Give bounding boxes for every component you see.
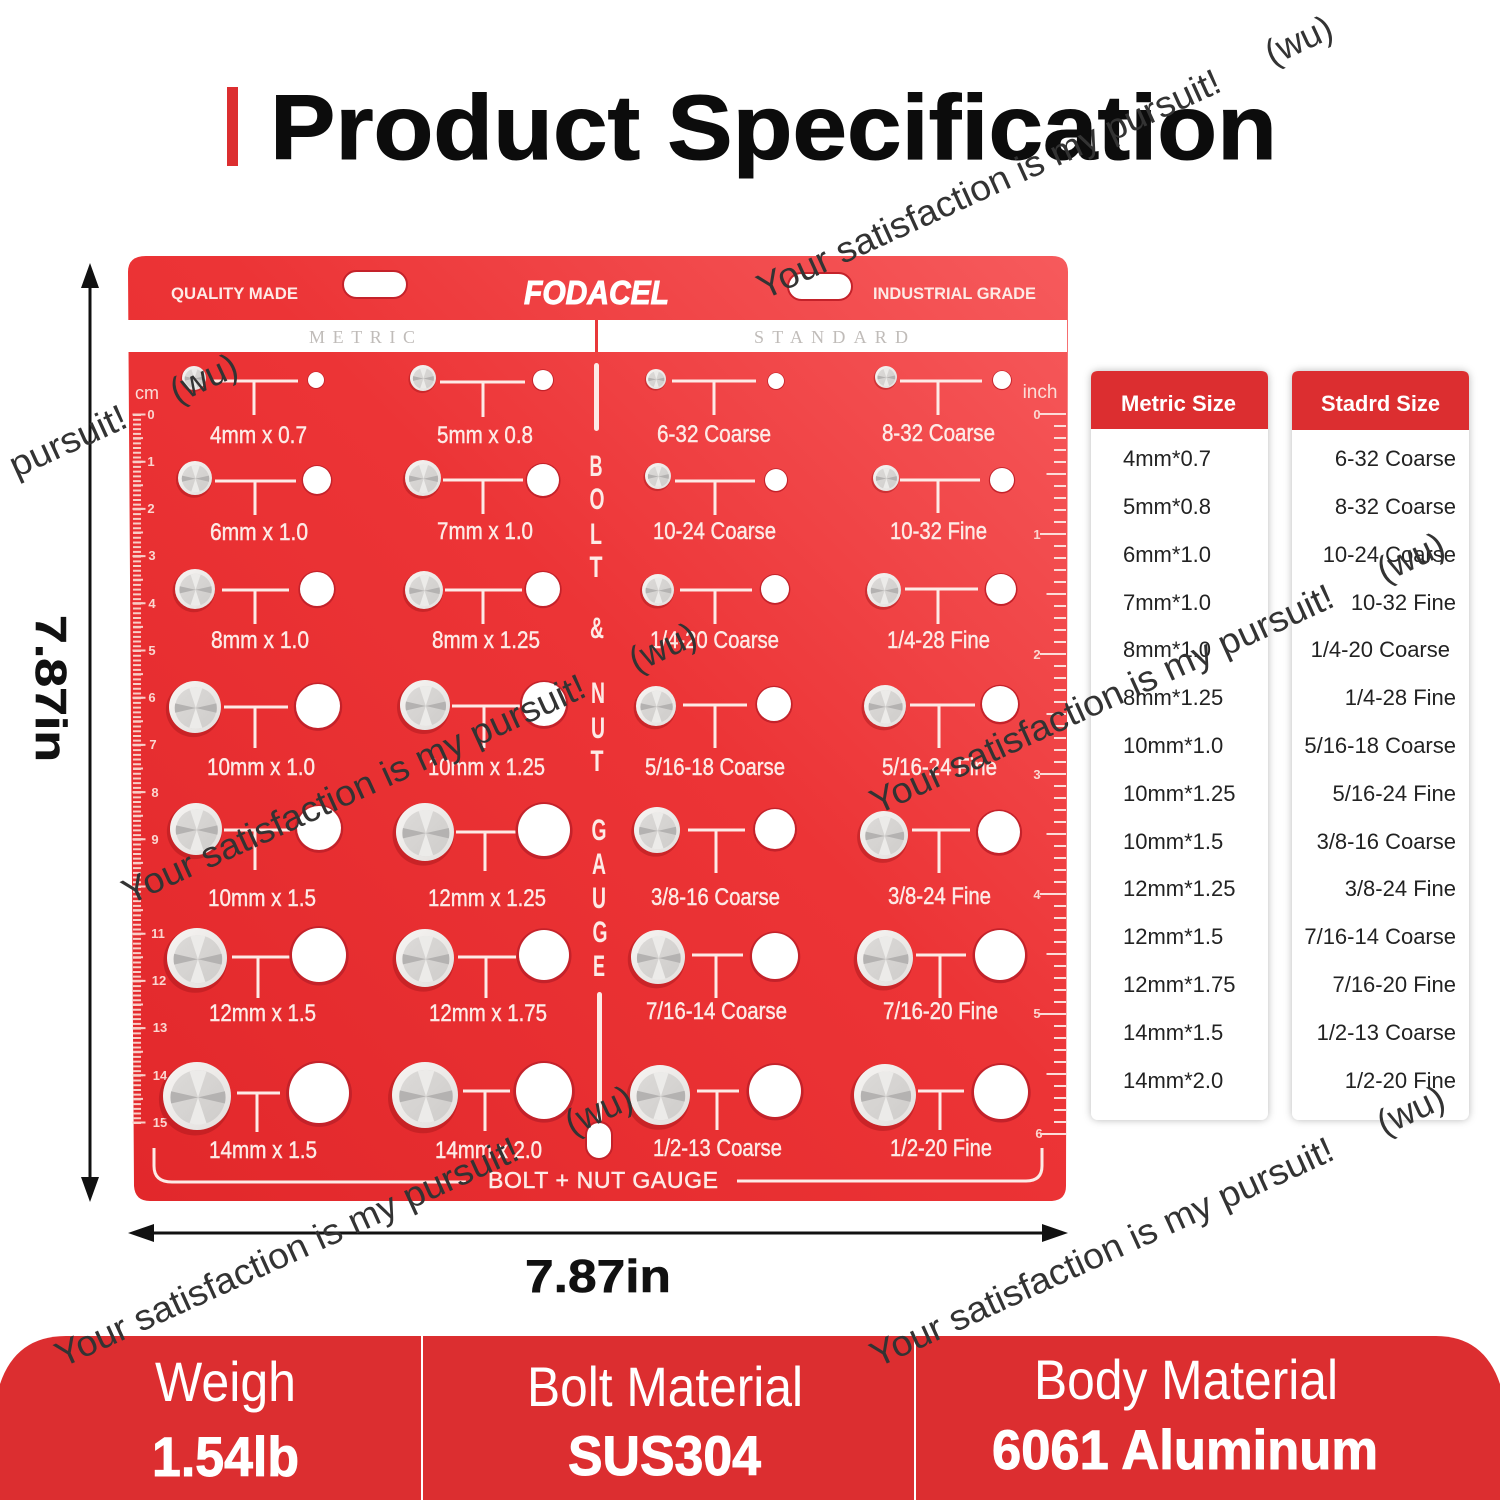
watermark text: (wu): [622, 614, 703, 680]
item: 5mm x 0.8: [408, 365, 554, 449]
item: 12mm x 1.75: 12mm x 1.75: [429, 1000, 547, 1027]
metric sizes list: 14mm*2.0: [1123, 1068, 1223, 1093]
centimetre ruler: 0: [147, 407, 155, 422]
item: 8mm x 1.0: [173, 569, 336, 654]
metric sizes list: 12mm*1.5: [1123, 924, 1223, 949]
standard sizes list: 5/16-24 Fine: [1332, 781, 1456, 806]
inch ruler: [1023, 382, 1060, 1141]
center vertical title: T: [590, 551, 602, 584]
gauge footer bracket: BOLT + NUT GAUGE: [488, 1167, 718, 1193]
item: 7/16-14 Coarse: [628, 930, 800, 1025]
item: 1/2-20 Fine: 1/2-20 Fine: [890, 1135, 992, 1162]
center vertical title: E: [593, 950, 605, 983]
metric table header: Metric Size: [1121, 391, 1236, 416]
item: 10mm x 1.25: 10mm x 1.25: [428, 754, 545, 781]
standard table header: Stadrd Size: [1321, 391, 1440, 416]
height dimension arrow: 7.87in: [26, 615, 75, 762]
body material block: [992, 1348, 1378, 1481]
center vertical title: G: [592, 916, 608, 949]
weigh block: 1.54lb: [152, 1425, 299, 1488]
centimetre ruler: [135, 383, 168, 1130]
standard sizes list: 1/2-20 Fine: [1345, 1068, 1456, 1093]
panel: standard size table: [1292, 371, 1469, 1120]
centimetre ruler: 14: [153, 1068, 168, 1083]
item: 8-32 Coarse: 8-32 Coarse: [882, 420, 995, 447]
title: Product Specification: [270, 77, 1277, 179]
item: 7/16-20 Fine: [854, 928, 1028, 1025]
inch ruler: 6: [1035, 1126, 1043, 1141]
plate header text: FODACEL: [524, 274, 669, 311]
item: 6mm x 1.0: 6mm x 1.0: [210, 519, 308, 546]
standard sizes list: 1/4-28 Fine: [1345, 685, 1456, 710]
watermark text: (wu): [1370, 1077, 1451, 1143]
item: 3/8-16 Coarse: [631, 807, 797, 911]
inch ruler: inch: [1023, 382, 1057, 403]
center vertical title: [586, 363, 612, 1159]
watermark text: (wu): [163, 345, 244, 411]
item: 4mm x 0.7: 4mm x 0.7: [210, 422, 307, 449]
plate body: [128, 256, 1068, 1201]
centimetre ruler: 9: [151, 832, 159, 847]
item: 7/16-14 Coarse: 7/16-14 Coarse: [646, 998, 787, 1025]
item: 4mm x 0.7: [181, 366, 325, 449]
item: 7mm x 1.0: [403, 460, 561, 545]
center vertical title: L: [590, 518, 602, 551]
height dimension arrow: [26, 263, 99, 1202]
item: 8mm x 1.0: 8mm x 1.0: [211, 627, 309, 654]
panel: bottom material band: [0, 1336, 1500, 1500]
center vertical title: G: [592, 814, 606, 847]
item: 1/2-20 Fine: [850, 1063, 1031, 1162]
item: 1/4-28 Fine: [865, 573, 1018, 654]
item: 5/16-18 Coarse: [634, 686, 793, 781]
item: 14mm x 1.5: [159, 1061, 352, 1164]
standard sizes list: 3/8-16 Coarse: [1317, 829, 1456, 854]
item: 3/8-24 Fine: 3/8-24 Fine: [888, 883, 991, 910]
metric sizes list: 5mm*0.8: [1123, 494, 1211, 519]
width dimension arrow: 7.87in: [525, 1250, 671, 1302]
mounting slots: [343, 271, 852, 300]
centimetre ruler: 13: [153, 1020, 167, 1035]
bolt material block: [527, 1355, 803, 1487]
watermark text: Your satisfaction is my pursuit!: [750, 61, 1227, 307]
watermark text: pursuit!: [2, 396, 133, 485]
inch ruler: 1: [1033, 527, 1041, 542]
metric sizes list: 10mm*1.5: [1123, 829, 1223, 854]
plate header text: INDUSTRIAL GRADE: [873, 284, 1036, 303]
item: 3/8-24 Fine: [857, 810, 1022, 910]
weigh block: Weigh: [155, 1350, 296, 1413]
width dimension arrow: [128, 1224, 1068, 1302]
item: 1/4-20 Coarse: [640, 574, 790, 654]
item: 10mm x 1.25: [397, 680, 568, 781]
standard sizes list: 10-32 Fine: [1351, 590, 1456, 615]
item: 1/2-13 Coarse: [626, 1063, 804, 1162]
item: 10mm x 1.5: [167, 803, 343, 912]
center vertical title: N: [591, 677, 605, 710]
item: 10-32 Fine: 10-32 Fine: [890, 518, 987, 545]
standard sizes list: 7/16-14 Coarse: [1304, 924, 1456, 949]
standard sizes list: 6-32 Coarse: [1335, 446, 1456, 471]
standard sizes list: 10-24 Coarse: [1323, 542, 1456, 567]
item: 12mm x 1.5: [163, 926, 349, 1027]
standard sizes list: 7/16-20 Fine: [1332, 972, 1456, 997]
item: 10-24 Coarse: 10-24 Coarse: [653, 518, 776, 545]
item: 6-32 Coarse: [645, 369, 785, 448]
metric and standard band: [128, 320, 1067, 352]
metric sizes list: 4mm*0.7: [1123, 446, 1211, 471]
metric sizes list: [1123, 446, 1236, 1093]
inch ruler: 2: [1033, 647, 1041, 662]
panel: metric size table: [1091, 371, 1268, 1120]
center vertical title: T: [590, 745, 604, 778]
centimetre ruler: 8: [151, 785, 159, 800]
item: 14mm x 2.0: [388, 1061, 575, 1164]
centimetre ruler: 7: [149, 737, 157, 752]
watermark text: Your satisfaction is my pursuit!: [863, 576, 1340, 822]
bolt material block: Bolt Material: [527, 1355, 803, 1418]
item: 12mm x 1.25: [393, 802, 573, 912]
metric sizes list: 12mm*1.25: [1123, 876, 1236, 901]
item: 6mm x 1.0: [176, 461, 332, 546]
centimetre ruler: 5: [148, 643, 156, 658]
centimetre ruler: 3: [148, 548, 156, 563]
centimetre ruler: 11: [151, 926, 165, 941]
center vertical title: A: [592, 848, 606, 881]
watermark text: (wu): [1370, 524, 1451, 590]
inch ruler: 4: [1033, 887, 1041, 902]
standard sizes list: 5/16-18 Coarse: [1304, 733, 1456, 758]
item: 8mm x 1.25: [403, 571, 562, 654]
inch ruler: 5: [1033, 1006, 1041, 1021]
metric sizes list: 12mm*1.75: [1123, 972, 1236, 997]
item: 5/16-24 Fine: 5/16-24 Fine: [882, 754, 997, 781]
item: 8-32 Coarse: [874, 366, 1012, 447]
item: 7/16-20 Fine: 7/16-20 Fine: [883, 998, 998, 1025]
body material block: Body Material: [1034, 1348, 1338, 1411]
centimetre ruler: 6: [148, 690, 156, 705]
gauge plate: [128, 256, 1068, 1201]
item: 1/4-20 Coarse: 1/4-20 Coarse: [650, 627, 779, 654]
center vertical title: &: [590, 612, 604, 645]
standard sizes list: 8-32 Coarse: [1335, 494, 1456, 519]
item: 12mm x 1.75: [393, 928, 572, 1027]
watermark text: (wu): [1258, 7, 1339, 73]
metric and standard band: STANDARD: [754, 327, 908, 347]
bolt material block: SUS304: [568, 1424, 761, 1487]
metric sizes list: 8mm*1.25: [1123, 685, 1223, 710]
item: 10-24 Coarse: [643, 463, 788, 545]
metric and standard band: METRIC: [309, 327, 415, 347]
item: 10mm x 1.5: 10mm x 1.5: [208, 885, 316, 912]
metric sizes list: 14mm*1.5: [1123, 1020, 1223, 1045]
item: 7mm x 1.0: 7mm x 1.0: [437, 518, 533, 545]
item: 8mm x 1.25: 8mm x 1.25: [432, 627, 540, 654]
item: 6-32 Coarse: 6-32 Coarse: [657, 421, 771, 448]
watermark text: Your satisfaction is my pursuit!: [48, 1129, 525, 1375]
center vertical title: U: [592, 882, 606, 915]
item: 5mm x 0.8: 5mm x 0.8: [437, 422, 533, 449]
item: 10-32 Fine: [871, 465, 1015, 545]
standard sizes list: 1/2-13 Coarse: [1317, 1020, 1456, 1045]
standard sizes list: 3/8-24 Fine: [1345, 876, 1456, 901]
center vertical title: B: [590, 450, 602, 483]
centimetre ruler: 12: [152, 973, 166, 988]
watermark text: (wu): [558, 1077, 639, 1143]
item: 3/8-16 Coarse: 3/8-16 Coarse: [651, 884, 780, 911]
center vertical title: O: [590, 483, 604, 516]
item: 10mm x 1.0: [166, 681, 342, 781]
watermark text: Your satisfaction is my pursuit!: [115, 666, 592, 912]
centimetre ruler: 4: [148, 596, 156, 611]
plate header text: QUALITY MADE: [171, 284, 298, 303]
standard sizes list: [1304, 446, 1456, 1093]
body material block: 6061 Aluminum: [992, 1418, 1378, 1481]
metric sizes list: 10mm*1.25: [1123, 781, 1236, 806]
item: 5/16-24 Fine: [861, 685, 1020, 781]
metric sizes list: 7mm*1.0: [1123, 590, 1211, 615]
centimetre ruler: 1: [147, 454, 155, 469]
item: 14mm x 1.5: 14mm x 1.5: [209, 1137, 317, 1164]
weigh block: [152, 1350, 299, 1488]
standard table header: [1292, 371, 1469, 430]
standard sizes list: 1/4-20 Coarse: [1311, 637, 1450, 662]
metric sizes list: 6mm*1.0: [1123, 542, 1211, 567]
item: 12mm x 1.5: 12mm x 1.5: [209, 1000, 316, 1027]
centimetre ruler: 2: [147, 501, 155, 516]
metric sizes list: 8mm*1.0: [1123, 637, 1211, 662]
metric sizes list: 10mm*1.0: [1123, 733, 1223, 758]
item: 10mm x 1.0: 10mm x 1.0: [207, 754, 315, 781]
metric table header: [1091, 371, 1268, 429]
item: 14mm x 2.0: 14mm x 2.0: [435, 1137, 542, 1164]
centimetre ruler: cm: [135, 383, 159, 403]
center vertical title: U: [591, 712, 605, 745]
plate header text: [171, 274, 1036, 311]
watermark text: Your satisfaction is my pursuit!: [863, 1129, 1340, 1375]
item: 1/4-28 Fine: 1/4-28 Fine: [887, 627, 990, 654]
inch ruler: 3: [1033, 767, 1041, 782]
item: 12mm x 1.25: 12mm x 1.25: [428, 885, 546, 912]
inch ruler: 0: [1033, 407, 1041, 422]
item: 5/16-18 Coarse: 5/16-18 Coarse: [645, 754, 785, 781]
item: 1/2-13 Coarse: 1/2-13 Coarse: [653, 1135, 782, 1162]
gauge footer bracket: [154, 1148, 1042, 1193]
centimetre ruler: 15: [153, 1115, 167, 1130]
